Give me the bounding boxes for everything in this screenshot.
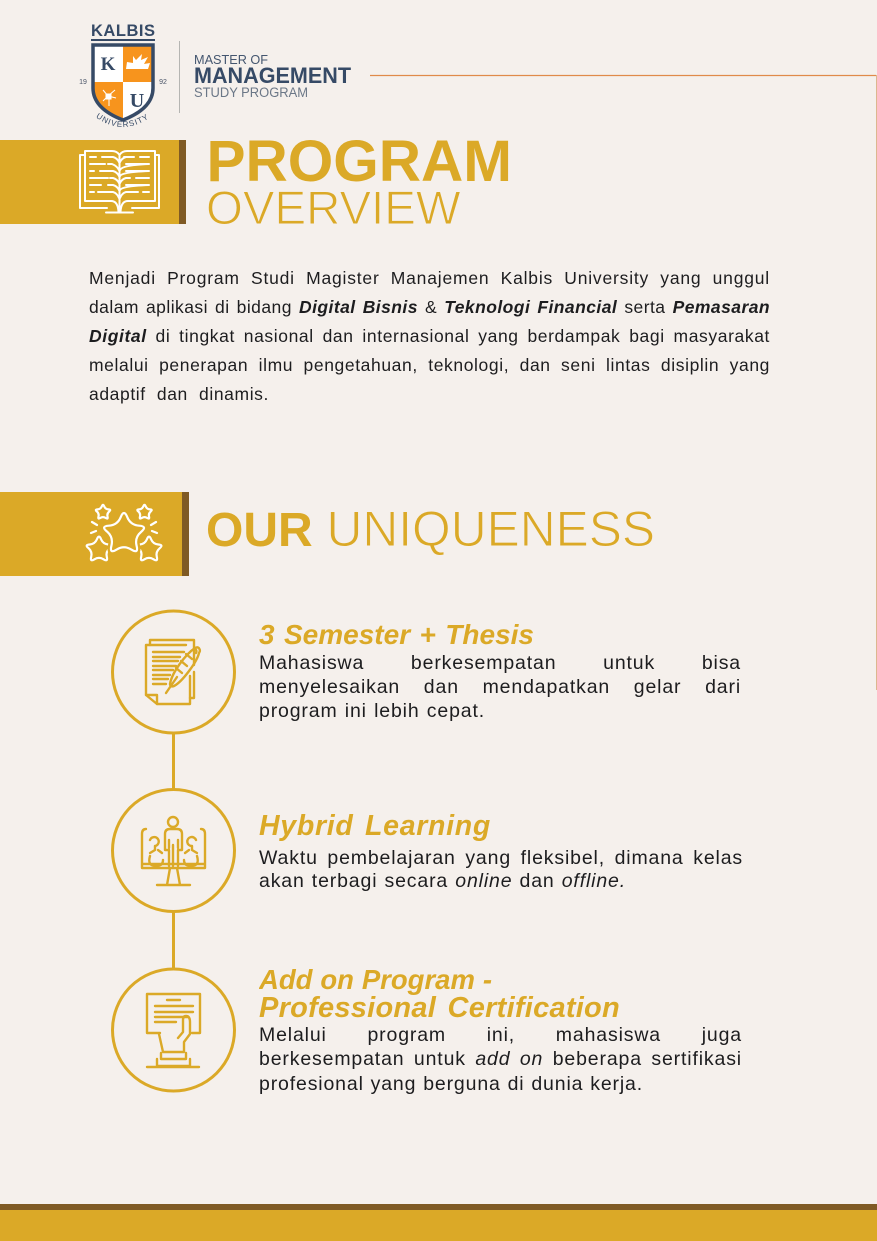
right edge rule [876, 75, 877, 690]
circle 3: professional certification [112, 969, 234, 1091]
item: hybrid learning: Hybrid Learning [259, 810, 491, 842]
logo: Kalbis University: UNIVERSITY [96, 113, 147, 128]
circle 2: hybrid learning [112, 790, 234, 912]
item: add on program [259, 964, 742, 1095]
item: 3 semester + thesis: 3 Semester + Thesis [259, 619, 534, 650]
footer bar [0, 1204, 877, 1241]
item: hybrid learning: Waktu pembelajaran yang fleksibel, dimana kelas [259, 847, 743, 869]
header rule [370, 74, 876, 76]
icon: open book tree [80, 151, 159, 212]
body paragraph: Digital di tingkat nasional dan internasional yang berdampak bagi masyarakat [89, 326, 770, 346]
item: add on program: berkesempatan untuk add on beberapa sertifikasi [259, 1048, 742, 1070]
logo: Kalbis University: KALBIS [91, 22, 155, 40]
body paragraph: adaptif dan dinamis. [89, 384, 269, 404]
body paragraph [89, 268, 770, 404]
program name: STUDY PROGRAM [194, 85, 308, 100]
item: hybrid learning: akan terbagi secara online dan offline. [259, 870, 626, 892]
logo: Kalbis University: 19 [79, 79, 87, 86]
title: program overview [206, 129, 512, 235]
title: program overview: PROGRAM [206, 129, 512, 194]
icon: stars [87, 505, 161, 560]
logo: Kalbis University: K [101, 54, 116, 75]
item: 3 semester + thesis: Mahasiswa berkesempatan untuk bisa [259, 652, 741, 674]
program name: MASTER OF [194, 53, 268, 67]
timeline connectors [172, 733, 175, 969]
banner: our uniqueness [0, 492, 189, 576]
item: hybrid learning [259, 810, 743, 892]
logo divider [179, 41, 180, 113]
title: our uniqueness: OUR UNIQUENESS [206, 501, 655, 557]
item: add on program: Add on Program - [259, 964, 492, 995]
body paragraph: Menjadi Program Studi Magister Manajemen Kalbis University yang unggul [89, 268, 770, 288]
logo: Kalbis University: 92 [159, 79, 167, 86]
title: program overview: OVERVIEW [206, 182, 461, 235]
logo: Kalbis University: U [130, 90, 144, 112]
item: 3 semester + thesis: menyelesaikan dan mendapatkan gelar dari [259, 676, 741, 698]
item: add on program: Professional Certification [259, 992, 620, 1024]
logo: Kalbis University [79, 22, 167, 128]
item: 3 semester + thesis: program ini lebih cepat. [259, 700, 485, 722]
banner: program overview [0, 140, 186, 224]
program name: MANAGEMENT [194, 63, 352, 88]
item: 3 semester + thesis [259, 619, 741, 722]
program name [194, 53, 352, 100]
body paragraph: dalam aplikasi di bidang Digital Bisnis & Teknologi Financial serta Pemasaran [89, 297, 770, 317]
item: add on program: Melalui program ini, mahasiswa juga [259, 1024, 742, 1046]
circle 1: document and quill [112, 611, 234, 733]
body paragraph: melalui penerapan ilmu pengetahuan, teknologi, dan seni lintas disiplin yang [89, 355, 770, 375]
item: add on program: profesional yang berguna di dunia kerja. [259, 1073, 643, 1095]
